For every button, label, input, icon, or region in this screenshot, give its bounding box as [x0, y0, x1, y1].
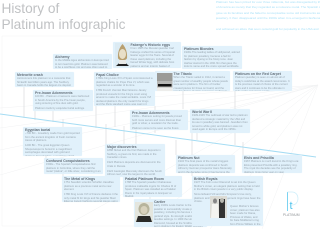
panel: Egyptian burial: Egyptian burial [25, 128, 50, 132]
panel: world war II [190, 109, 250, 133]
panel: platinum blondes: 1930s The leading ladies of Hollywood, adored for platinum jewellery, became a fad for fashion by dyeing to the frosty tone. Jean Harlow starred in the 1931 film that gave the look its name and the craze spread worldwide. [184, 51, 240, 68]
panel: platinum on the red carpet [233, 71, 292, 91]
panel: pre-Inuan adornments second: 1900s - Platinum setting for jewels proved both more secure and more discreet than gold or silver, a revelation for the trade. [132, 115, 182, 125]
panel: the metal of kings: 1751 Swedish scientist Scheffer classifies platinum as a precious metal and a new element. [64, 181, 114, 191]
panel: major discoveries: 1924 Platinum deposits are discovered in the Urals in Russia. [107, 161, 161, 168]
panel: world war II: World War II [192, 110, 212, 114]
panel: confused conquistadores [44, 158, 103, 174]
panel: Faberge eggs [113, 42, 181, 68]
panel: major discoveries: Major discoveries [107, 145, 137, 149]
logo: Platinum: PLATINUM [283, 212, 300, 216]
panel: the metal of kings: The Metal of Kings [64, 177, 95, 181]
intro text [216, 0, 320, 31]
panel: Cartier: Cartier [154, 200, 165, 204]
icon: titanic photo [157, 73, 172, 91]
intro text: and achieved an allure that soon outsold gold for popularity in the USA and [216, 27, 319, 31]
panel: world war II: 1939-1945 The outbreak of war led to platinum declared a strategic material by the USA and its use in jewellery was banned. Jewellers then turned to white gold, and platinum was not used again in Europe until the 1950s. [192, 114, 248, 131]
logo: Platinum [283, 192, 300, 216]
icon: royal couple photo [210, 196, 227, 218]
panel: major discoveries: 1924 Geologist Merensky discovers the South African reef, now the largest in the world. [107, 170, 162, 176]
panel: platinum nut: Platinum Nut [178, 156, 200, 160]
icon: egg photo [116, 44, 129, 66]
panel: major discoveries [105, 144, 165, 177]
intro text: gave us its faculties and the failed to conceptualise some old instruments as [216, 11, 320, 15]
panel: Faberge eggs: Faberge's Historic eggs [130, 43, 170, 47]
panel: Egyptian burial: ~700 BC - Jewellery made from gold imported from the ancient kingdom of Kush contains traces of platinum. [25, 132, 80, 142]
panel: platinum blondes [182, 46, 242, 69]
timeline [0, 114, 316, 157]
panel: British royals [192, 176, 263, 226]
panel: palatial platinum room [123, 176, 182, 197]
panel: pre-Inuan adornments: Pre-Inuan Adornments [35, 91, 73, 95]
panel: platinum blondes: Platinum Blondes [184, 47, 214, 51]
panel: pre-Inuan adornments [33, 90, 93, 111]
panel: British royals: Since Edward VIII and Mrs Simpson's love story, platinum and diamond engagement rings have been the choice. [194, 193, 260, 203]
panel: platinum on the red carpet: Platinum on the Red Carpet [235, 72, 281, 76]
panel: pre-Inuan adornments second: Platinum came to be seen as the finest. [132, 127, 179, 130]
panel: platinum nut [176, 155, 235, 173]
panel: alchemy [53, 54, 112, 69]
panel: pre-Inuan adornments: Platinum tools by exquisite burial settings. [35, 107, 85, 110]
logo: Platinum: t [290, 200, 293, 212]
panel: the titanic [155, 71, 230, 91]
panel: confused conquistadores: Confused Conquistadores [46, 159, 90, 163]
panel: Elvis and Priscilla [242, 155, 302, 173]
panel: Elvis and Priscilla: Elvis and Priscilla [244, 156, 274, 160]
panel: pre-Inuan adornments second [130, 110, 188, 130]
panel: British royals: 1937 The Koh-i-noor Diamond is set into the Queen Mother's crown, an elegant platinum setting that is held in the British crown jewels in a very public display. [194, 181, 260, 191]
title [2, 1, 126, 32]
icon: Cartier portrait [135, 202, 153, 222]
panel: Cartier [134, 199, 207, 227]
panel: papal chalice: Papal Chalice [96, 73, 119, 77]
panel: meteorite crash [15, 72, 74, 87]
panel: pre-Inuan adornments: 100 BC - Platinum ornaments were fashioned in South America by the Pre-Inuan people, using sintering of fine dust with gold. [35, 95, 89, 105]
panel: the metal of kings [62, 176, 120, 202]
panel: the titanic: The Titanic [174, 72, 192, 76]
panel: Egyptian burial [23, 127, 82, 156]
panel: palatial platinum room: Palatial Platinum Room [125, 177, 164, 181]
title: Platinum infographic [2, 17, 126, 32]
panel: papal chalice [94, 72, 155, 106]
panel: alchemy: Alchemy [55, 55, 70, 59]
panel: meteorite crash: Meteorite crash [17, 73, 43, 77]
panel: papal chalice: 1780s King Louis XVI of Spain commissioned a platinum chalice for Pope Pius VI, which was regarded as a wonder of its time. [96, 77, 152, 87]
panel: pre-Inuan adornments second: Pre-Inuan Adornments [132, 111, 170, 115]
title: History of [2, 1, 59, 16]
panel: major discoveries: 1888 Nickel and the first Platinum deposits in Sudbury, a great ore find, are made in the Canadian mines. [107, 149, 161, 159]
panel: British royals: British Royals [194, 177, 218, 181]
